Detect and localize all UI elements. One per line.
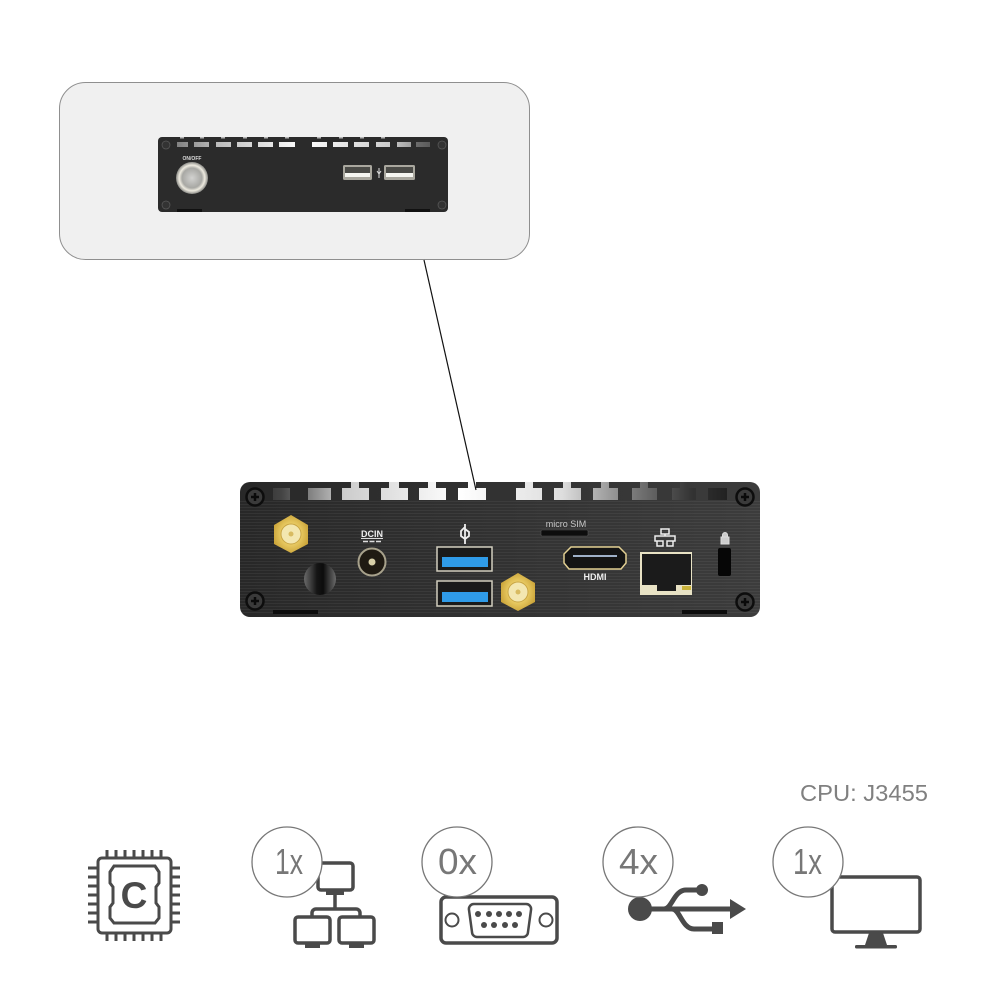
USB 3 port upper	[437, 547, 492, 571]
icon: serial port	[441, 897, 557, 943]
badge: 1x network	[252, 827, 322, 897]
label: HDMI: HDMI	[584, 572, 606, 582]
label: CPU model: CPU: J3455	[800, 780, 928, 806]
vent slots	[273, 482, 727, 500]
badge: 1x network: 1x	[275, 841, 303, 882]
RJ45 port	[640, 552, 692, 595]
badge: 4x USB: 4x	[619, 841, 658, 882]
micro SIM slot	[541, 530, 588, 536]
badge: 4x USB	[603, 827, 673, 897]
badge: 1x display: 1x	[793, 841, 822, 882]
gold antenna connector 2	[501, 573, 535, 611]
Kensington slot	[718, 548, 731, 576]
label: micro SIM: micro SIM	[546, 519, 586, 529]
feet	[273, 610, 727, 614]
icon: monitor	[832, 877, 920, 948]
icon: LAN symbol	[655, 529, 675, 546]
connector line	[424, 260, 476, 490]
icon: USB	[628, 884, 746, 934]
label: ON/OFF: ON/OFF	[183, 156, 201, 162]
icon: network	[295, 863, 374, 946]
rear device photo	[240, 482, 760, 617]
icon: CPU chip: C	[121, 875, 147, 916]
gold antenna connector 1	[274, 515, 308, 553]
panel: front view callout	[60, 82, 530, 260]
label: DCIN: DCIN	[361, 529, 383, 539]
USB 3 port lower	[437, 581, 492, 606]
HDMI port	[564, 547, 626, 569]
icon: lock	[721, 532, 729, 544]
badge: 0x serial	[422, 827, 492, 897]
icon: USB symbol	[461, 524, 469, 544]
icon: CPU chip	[88, 850, 180, 941]
screws	[246, 488, 754, 610]
badge: 1x display	[773, 827, 843, 897]
front device photo	[158, 137, 448, 212]
DC jack	[358, 548, 386, 576]
badge: 0x serial: 0x	[438, 841, 477, 882]
antenna knob	[304, 563, 336, 595]
front USB ports	[343, 165, 415, 180]
power button	[176, 162, 208, 194]
